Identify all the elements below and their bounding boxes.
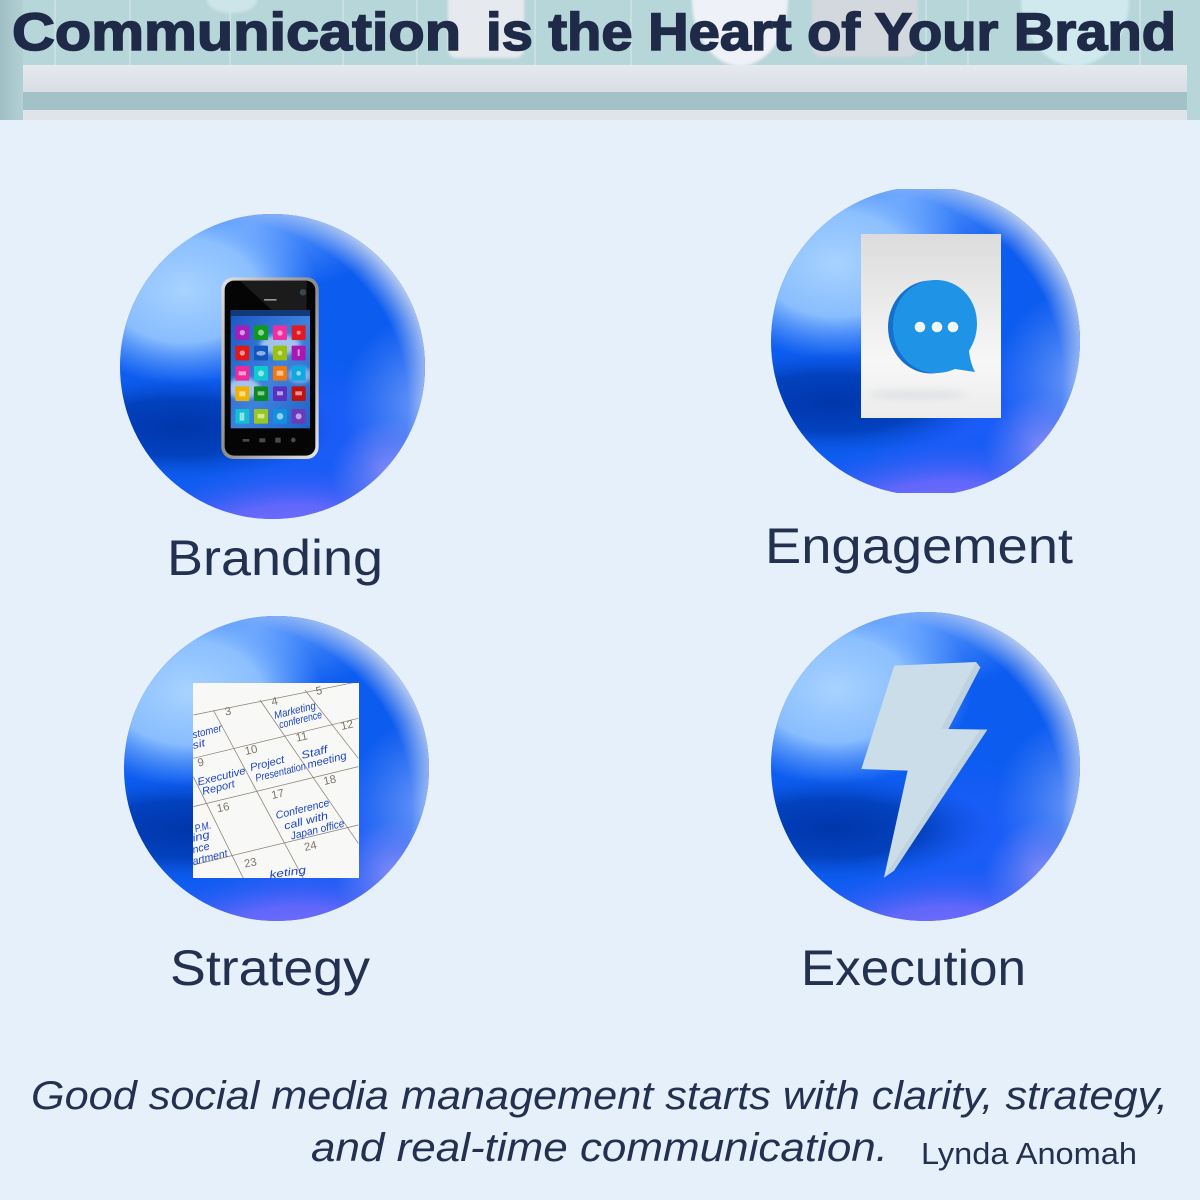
header photo banner [0,0,1200,120]
icon: calendar photo: call with [283,810,329,833]
orb: branding [21,158,524,630]
icon: calendar photo: 18 [322,774,337,788]
title [12,3,1176,62]
title: Communication [12,3,461,62]
closing quote: and real-time communication. [311,1126,888,1170]
icon: calendar photo: artment [191,847,230,868]
icon: calendar photo: Conference [274,797,331,822]
label: Engagement: Engagement [765,518,1073,574]
icon: calendar photo: 12 [340,719,355,733]
icon: calendar photo: 3 [224,706,232,719]
title: is the Heart of Your Brand [486,3,1176,62]
icon: calendar photo: Japan office [289,818,346,843]
icon: calendar photo: keting [269,864,307,881]
icon: calendar photo: 4 [270,696,279,709]
icon: calendar photo: ing [191,829,211,845]
icon: calendar photo: Presentation [254,760,307,785]
icon: calendar photo: sit [191,737,208,752]
icon: calendar photo: 17 [270,788,285,802]
orb: execution [671,555,1180,1034]
panel: branding [120,214,425,586]
icon: chat bubble photo [861,234,1001,418]
label: Execution: Execution [801,940,1026,996]
icon: calendar photo: stomer [191,722,224,741]
icon: calendar photo: 5 [315,685,323,698]
icon: calendar photo: 11 [295,730,309,745]
icon: calendar photo: Project [249,754,287,774]
panel: execution [671,555,1180,1034]
icon: calendar photo: Marketing [273,700,317,722]
panel: strategy [124,616,429,996]
icon: lightning bolt [861,662,987,878]
icon: calendar photo: 9 [196,757,205,770]
icon: calendar photo: Staff [300,744,330,762]
icon: calendar photo: nce [191,840,211,856]
icon: calendar photo: Executive [196,765,247,789]
label: Branding: Branding [167,530,383,586]
icon: calendar photo: 23 [243,856,258,871]
icon: calendar photo: 24 [303,840,318,854]
panel: engagement [769,189,1080,574]
label: Strategy: Strategy [170,940,370,996]
icon: calendar photo: conference [278,709,323,731]
author credit: Lynda Anomah [921,1136,1137,1171]
icon: calendar photo: 16 [216,801,231,815]
closing quote: Good social media management starts with clarity, strategy, [31,1074,1168,1118]
icon: calendar photo: Report [201,778,237,798]
orb: strategy [25,560,528,1032]
icon: calendar photo: 10 [244,744,259,758]
icon: smartphone [221,277,319,459]
closing quote [31,1074,1168,1170]
orb: engagement [771,189,1080,493]
icon: calendar photo: P.M. [193,820,213,835]
icon: calendar photo: meeting [306,750,348,771]
icon: calendar photo [191,682,359,881]
